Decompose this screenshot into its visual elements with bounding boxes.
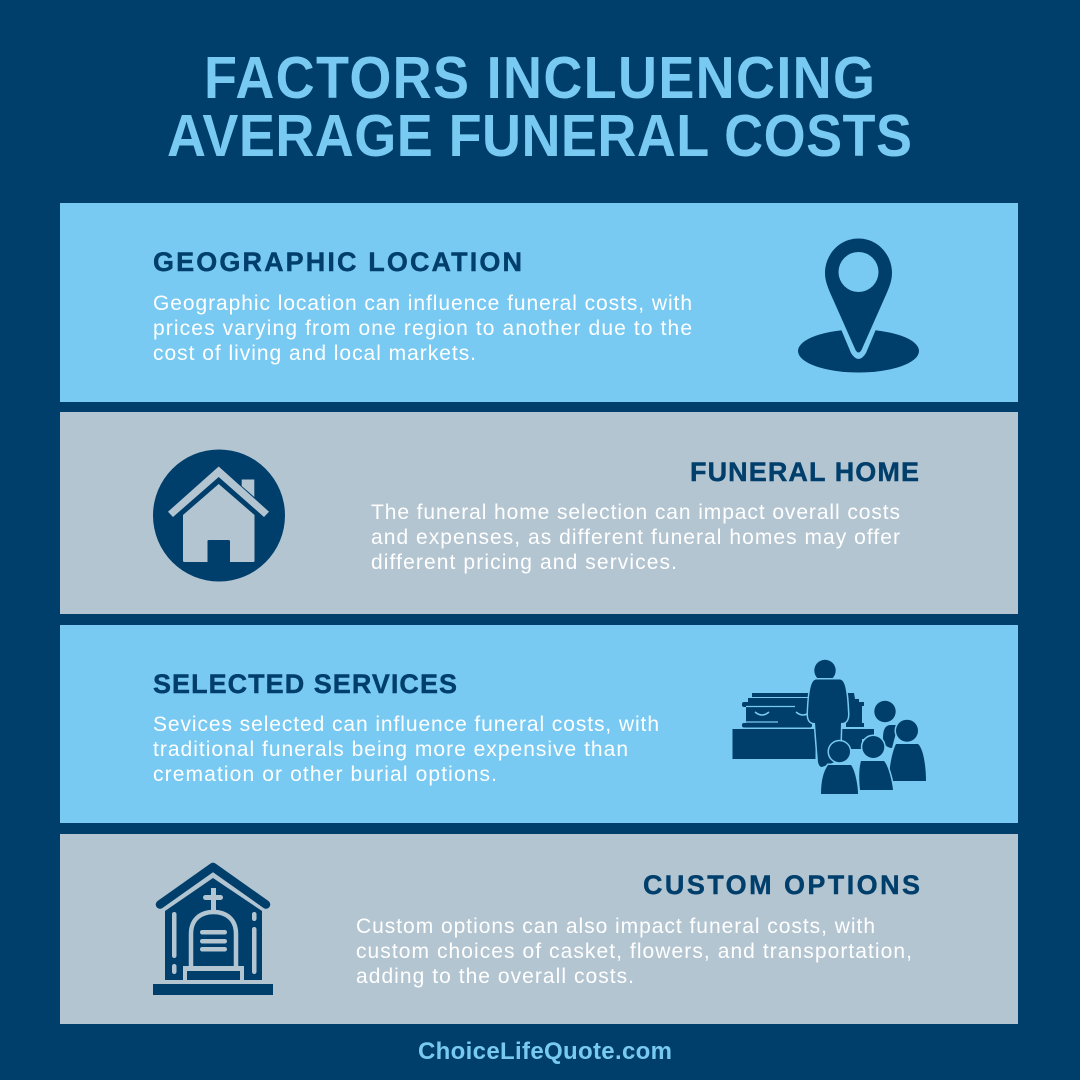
panel: funeral home (60, 412, 1018, 614)
heading: geographic location: GEOGRAPHIC LOCATION (153, 247, 522, 277)
text block: selected services: traditional funerals being more expensive than (153, 738, 628, 761)
text block: geographic location: cost of living and local markets. (153, 342, 476, 365)
icon: house (153, 450, 285, 582)
text block: funeral home: and expenses, as different funeral homes may offer (371, 526, 900, 549)
text block: funeral home: different pricing and services. (371, 551, 677, 574)
heading: custom options: CUSTOM OPTIONS (643, 870, 920, 900)
text block: funeral home (371, 501, 900, 574)
text block: selected services (153, 713, 659, 786)
title (167, 46, 912, 170)
panel: selected services (60, 625, 1018, 823)
text block: funeral home: The funeral home selection can impact overall costs (371, 501, 900, 524)
footer: website: ChoiceLifeQuote.com (418, 1038, 672, 1065)
heading: selected services: SELECTED SERVICES (153, 669, 457, 699)
text block: custom options (356, 915, 912, 988)
text block: custom options: custom choices of casket, flowers, and transportation, (356, 940, 912, 963)
text block: selected services: Sevices selected can influence funeral costs, with (153, 713, 659, 736)
text block: geographic location: prices varying from one region to another due to the (153, 317, 692, 340)
icon: mausoleum (153, 867, 273, 995)
text block: custom options: adding to the overall costs. (356, 965, 634, 988)
text block: geographic location (153, 292, 692, 365)
heading: funeral home: FUNERAL HOME (690, 457, 919, 487)
icon: location pin (798, 238, 919, 372)
text block: selected services: cremation or other burial options. (153, 763, 497, 786)
panel: geographic location (60, 203, 1018, 402)
panel: custom options (60, 834, 1018, 1024)
text block: geographic location: Geographic location can influence funeral costs, with (153, 292, 692, 315)
title: AVERAGE FUNERAL COSTS (167, 104, 912, 170)
text block: custom options: Custom options can also impact funeral costs, with (356, 915, 875, 938)
icon: mourners at casket (732, 660, 926, 794)
title: FACTORS INCLUENCING (204, 46, 875, 112)
